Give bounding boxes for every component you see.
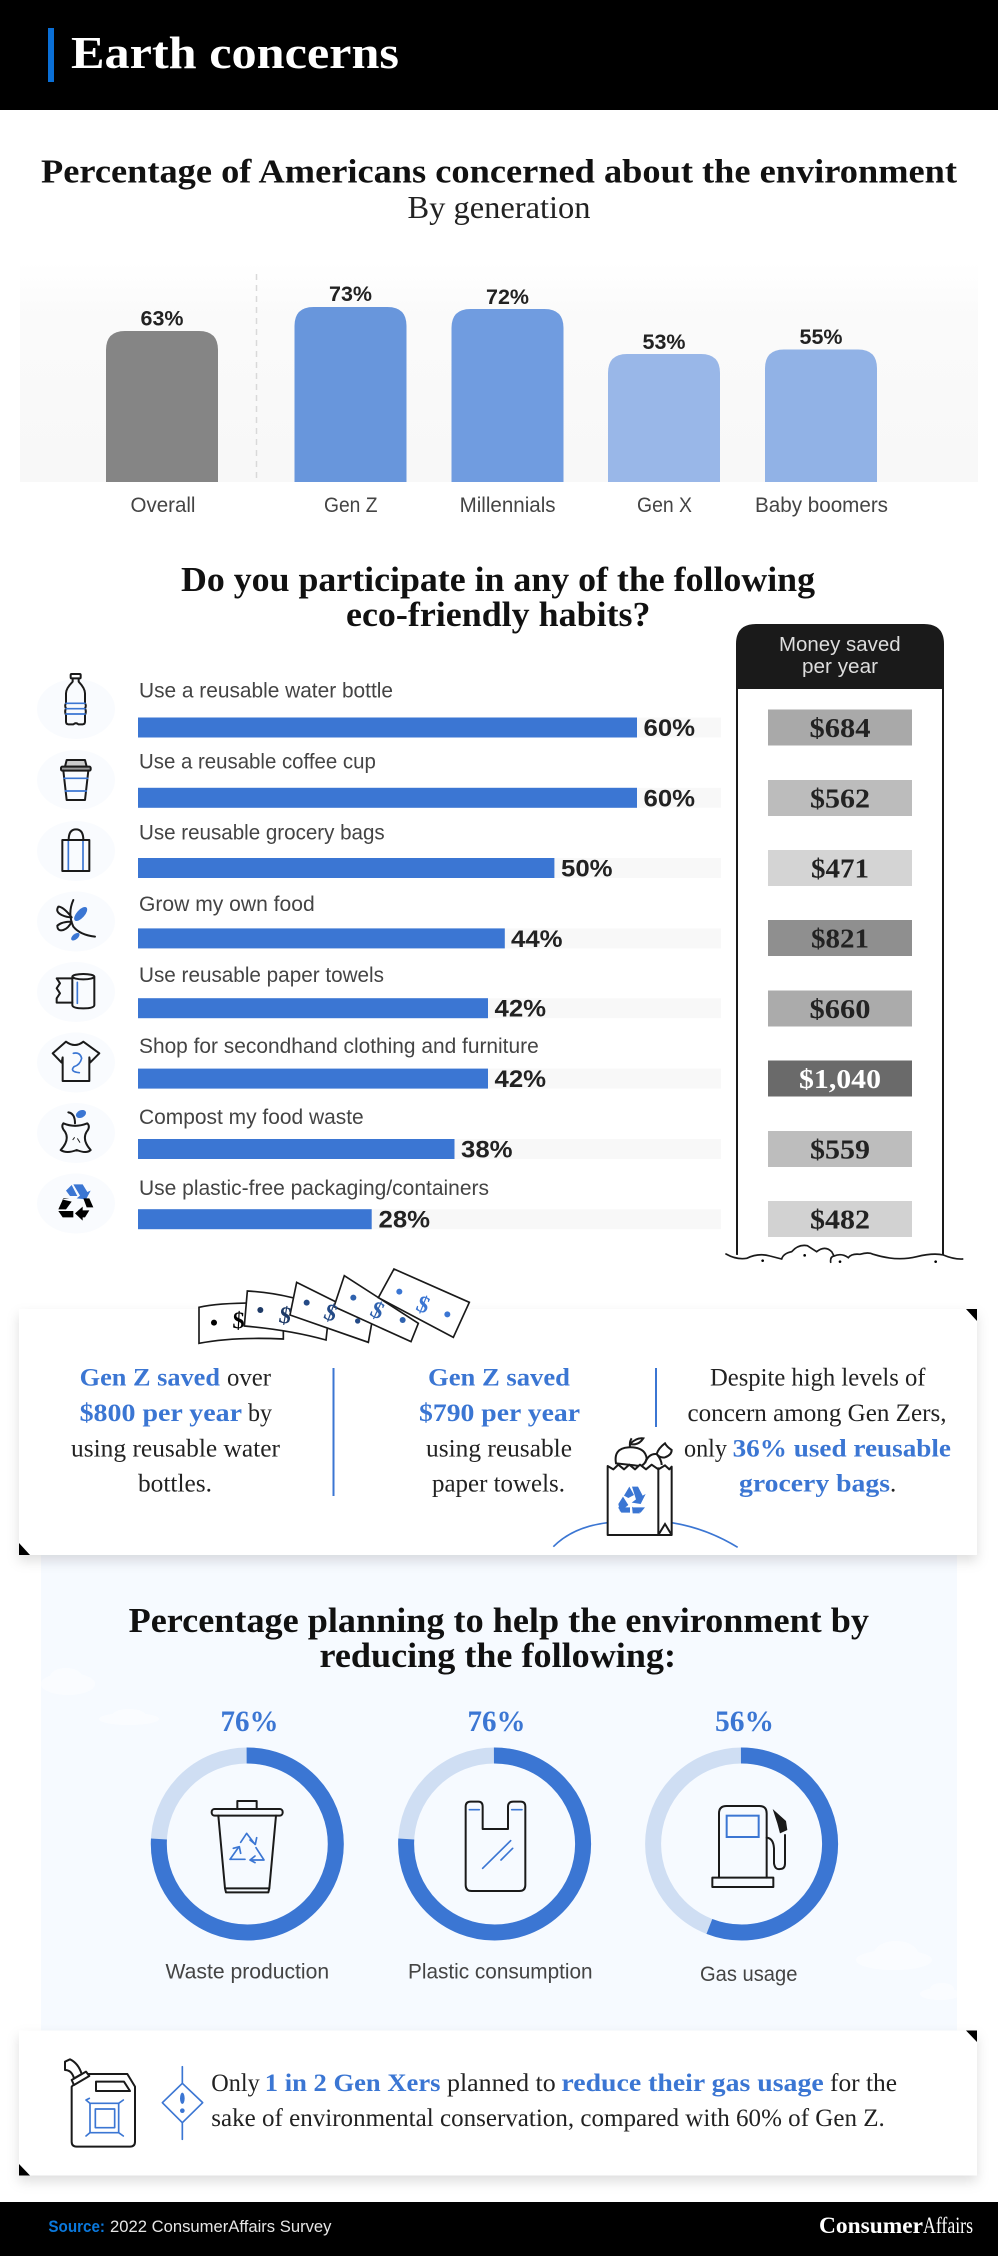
value: $559 bbox=[768, 1131, 912, 1167]
habit row: secondhand clothing and furniture: 42% bbox=[494, 1066, 546, 1093]
callout: water bottles savings: $800 per year bbox=[80, 1400, 242, 1427]
bar: Gen Z bbox=[294, 283, 406, 517]
value: $562: $562 bbox=[810, 784, 870, 814]
donut: gas usage: Gas usage bbox=[700, 1963, 797, 1986]
icon: coffee cup bbox=[61, 760, 91, 800]
bar: Overall bbox=[106, 307, 218, 517]
icon: flying dollar bills: $ bbox=[277, 1302, 293, 1330]
habit row: reusable coffee cup: Use a reusable coffee cup bbox=[139, 750, 376, 774]
callout: grocery bags: Despite high levels of bbox=[710, 1365, 926, 1392]
panel: money saved per year bbox=[736, 624, 944, 1256]
icon: recycling symbol bbox=[58, 1184, 93, 1221]
habit row: secondhand clothing and furniture: Shop for secondhand clothing and furniture bbox=[139, 1035, 539, 1058]
bar: Millennials bbox=[452, 286, 564, 517]
value: $1,040: $1,040 bbox=[799, 1064, 881, 1094]
value: $1,040 bbox=[768, 1060, 912, 1096]
bar: Baby boomers: Baby boomers bbox=[755, 494, 888, 517]
bar: Millennials: Millennials bbox=[460, 494, 556, 517]
icon: t-shirt bbox=[53, 1042, 99, 1081]
logo wordmark: Consumer bbox=[819, 2213, 923, 2238]
habit row: compost food waste: Compost my food waste bbox=[139, 1106, 364, 1129]
donut: gas usage: 56% bbox=[715, 1705, 774, 1738]
logo wordmark bbox=[819, 2213, 973, 2238]
value: $562 bbox=[768, 780, 912, 816]
heading: concern by generation: By generation bbox=[408, 189, 590, 225]
heading: planning to reduce: reducing the following: bbox=[320, 1636, 676, 1675]
callout: grocery bags: concern among Gen Zers, bbox=[688, 1400, 946, 1427]
logo wordmark: Affairs bbox=[923, 2213, 973, 2238]
habit row: grow my own food bbox=[37, 892, 721, 953]
panel: light-blue reduction section background bbox=[41, 1550, 957, 2032]
value: $660 bbox=[768, 990, 912, 1026]
habit row: secondhand clothing and furniture bbox=[37, 1032, 721, 1093]
habit row: reusable grocery bags: Use reusable grocery bags bbox=[139, 822, 385, 845]
icon: tote bag bbox=[62, 829, 89, 871]
icon: flying dollar bills: $ bbox=[320, 1299, 341, 1328]
value: $821: $821 bbox=[811, 924, 869, 954]
icon: flying dollar bills: $ bbox=[232, 1308, 245, 1335]
callout text: reduce their gas usage bbox=[561, 2070, 824, 2097]
value: $559: $559 bbox=[810, 1134, 870, 1164]
habit row: reusable water bottle: 60% bbox=[644, 715, 695, 742]
callout: paper towels savings: paper towels. bbox=[432, 1471, 565, 1498]
icon: flying dollar bills bbox=[199, 1269, 469, 1343]
panel: money saved per year: per year bbox=[802, 656, 878, 678]
clouds bbox=[41, 1668, 960, 2000]
callout: grocery bags: . bbox=[890, 1471, 896, 1498]
callout text: sake of environmental conservation, compared with 60% of Gen Z. bbox=[211, 2105, 885, 2132]
title: Earth concerns bbox=[71, 27, 399, 78]
footer band bbox=[0, 2202, 998, 2256]
callout: grocery bags: only bbox=[684, 1435, 727, 1462]
header accent bar bbox=[48, 28, 54, 82]
callout: water bottles savings: bottles. bbox=[138, 1471, 212, 1498]
heading: eco-friendly habits: Do you participate in any of the following bbox=[181, 560, 816, 599]
habit row: grow my own food: 44% bbox=[511, 926, 563, 953]
donut: plastic consumption: Plastic consumption bbox=[408, 1960, 593, 1984]
callout: grocery bags: 36% used reusable bbox=[733, 1435, 951, 1462]
bar: Baby boomers: 55% bbox=[800, 326, 843, 349]
callout: water bottles savings: Gen Z saved bbox=[80, 1365, 220, 1392]
icon: plant sprig bbox=[57, 900, 95, 942]
card: Gen Z savings callouts bbox=[19, 1269, 977, 1555]
callout: water bottles savings: by bbox=[248, 1400, 272, 1427]
icon: jerry can bbox=[65, 2059, 135, 2147]
icon: grocery bag with produce bbox=[553, 1438, 738, 1547]
habit row: reusable coffee cup bbox=[37, 750, 721, 812]
habit row: reusable water bottle bbox=[37, 674, 721, 742]
header band bbox=[0, 0, 998, 110]
icon: water bottle bbox=[65, 674, 86, 724]
habit row: plastic-free packaging: 28% bbox=[378, 1207, 430, 1234]
bar: Overall: 63% bbox=[140, 307, 184, 330]
icon: paper towel roll bbox=[57, 974, 94, 1008]
habit row: reusable grocery bags bbox=[37, 821, 721, 882]
value: $482: $482 bbox=[810, 1204, 870, 1234]
callout: water bottles savings: using reusable water bbox=[71, 1435, 281, 1462]
callout text bbox=[211, 2070, 897, 2132]
icon: flying dollar bills: $ bbox=[412, 1291, 433, 1320]
donut: waste production bbox=[159, 1705, 336, 1984]
heading: concern by generation bbox=[41, 154, 958, 225]
habit row: compost food waste: 38% bbox=[461, 1136, 513, 1164]
bar: Gen X: Gen X bbox=[637, 494, 692, 517]
ground squiggle bbox=[726, 1245, 963, 1263]
callout: paper towels savings bbox=[419, 1365, 580, 1498]
bar: Gen X bbox=[608, 331, 720, 517]
panel: money saved per year: Money saved bbox=[779, 634, 901, 656]
heading: eco-friendly habits: eco-friendly habits? bbox=[346, 595, 650, 634]
card: Gen X gas usage callout bbox=[19, 2030, 977, 2176]
icon: trash can bbox=[212, 1801, 283, 1892]
heading: planning to reduce: Percentage planning to help the environment by bbox=[129, 1601, 870, 1640]
habit row: compost food waste bbox=[37, 1103, 721, 1164]
callout: paper towels savings: Gen Z saved bbox=[428, 1365, 570, 1392]
value: $471 bbox=[768, 850, 912, 886]
bar: Overall: Overall bbox=[130, 494, 196, 517]
donut: waste production: Waste production bbox=[166, 1960, 329, 1984]
icon: gas pump bbox=[712, 1806, 787, 1887]
callout text: 1 in 2 Gen Xers bbox=[265, 2070, 441, 2097]
callout: grocery bags bbox=[684, 1365, 951, 1498]
card corner marks bbox=[19, 1309, 977, 1555]
callout text: for the bbox=[830, 2070, 897, 2097]
heading: concern by generation: Percentage of Americans concerned about the environment bbox=[41, 154, 958, 190]
heading: planning to reduce bbox=[129, 1601, 870, 1675]
habit row: reusable paper towels bbox=[37, 962, 721, 1023]
habit row: plastic-free packaging bbox=[37, 1174, 721, 1234]
callout: water bottles savings bbox=[71, 1365, 281, 1498]
habit row: grow my own food: Grow my own food bbox=[139, 893, 315, 916]
value: $660: $660 bbox=[810, 994, 870, 1024]
bar: Gen Z: Gen Z bbox=[324, 494, 378, 517]
donut: plastic consumption bbox=[406, 1705, 593, 1984]
card corner marks bbox=[19, 2030, 977, 2176]
icon: plastic bag bbox=[466, 1802, 525, 1891]
habit row: reusable water bottle: Use a reusable water bottle bbox=[139, 680, 393, 702]
bar: Gen X: 53% bbox=[642, 331, 686, 354]
value: $471: $471 bbox=[811, 854, 869, 884]
bar chart: concern by generation bbox=[20, 262, 978, 517]
callout: paper towels savings: using reusable bbox=[426, 1435, 572, 1462]
donut: waste production: 76% bbox=[220, 1705, 278, 1738]
callout text: planned to bbox=[447, 2070, 556, 2097]
callout: paper towels savings: $790 per year bbox=[419, 1400, 580, 1427]
habit row: reusable coffee cup: 60% bbox=[644, 785, 695, 812]
habit row: reusable paper towels: Use reusable paper towels bbox=[139, 964, 384, 987]
habit row: plastic-free packaging: Use plastic-free packaging/containers bbox=[139, 1177, 489, 1200]
habit row: reusable grocery bags: 50% bbox=[561, 856, 613, 882]
value: $482 bbox=[768, 1201, 912, 1237]
callout text: Only bbox=[211, 2070, 260, 2097]
heading: eco-friendly habits bbox=[181, 560, 816, 634]
value: $821 bbox=[768, 920, 912, 956]
donut: gas usage bbox=[653, 1705, 830, 1986]
donut: plastic consumption: 76% bbox=[468, 1705, 526, 1738]
bar: Baby boomers bbox=[755, 326, 888, 517]
icon: flying dollar bills: $ bbox=[366, 1297, 388, 1325]
callout: grocery bags: grocery bags bbox=[739, 1471, 890, 1498]
source line: Source: bbox=[48, 2217, 105, 2236]
bar: Millennials: 72% bbox=[486, 286, 529, 309]
value: $684: $684 bbox=[810, 713, 870, 743]
value: $684 bbox=[768, 710, 912, 746]
bar: Gen Z: 73% bbox=[329, 283, 372, 306]
callout: water bottles savings: over bbox=[227, 1365, 272, 1392]
icon: warning diamond bbox=[162, 2067, 203, 2139]
icon: apple core bbox=[61, 1108, 91, 1152]
habit row: reusable paper towels: 42% bbox=[494, 996, 546, 1023]
source line: 2022 ConsumerAffairs Survey bbox=[110, 2217, 332, 2236]
